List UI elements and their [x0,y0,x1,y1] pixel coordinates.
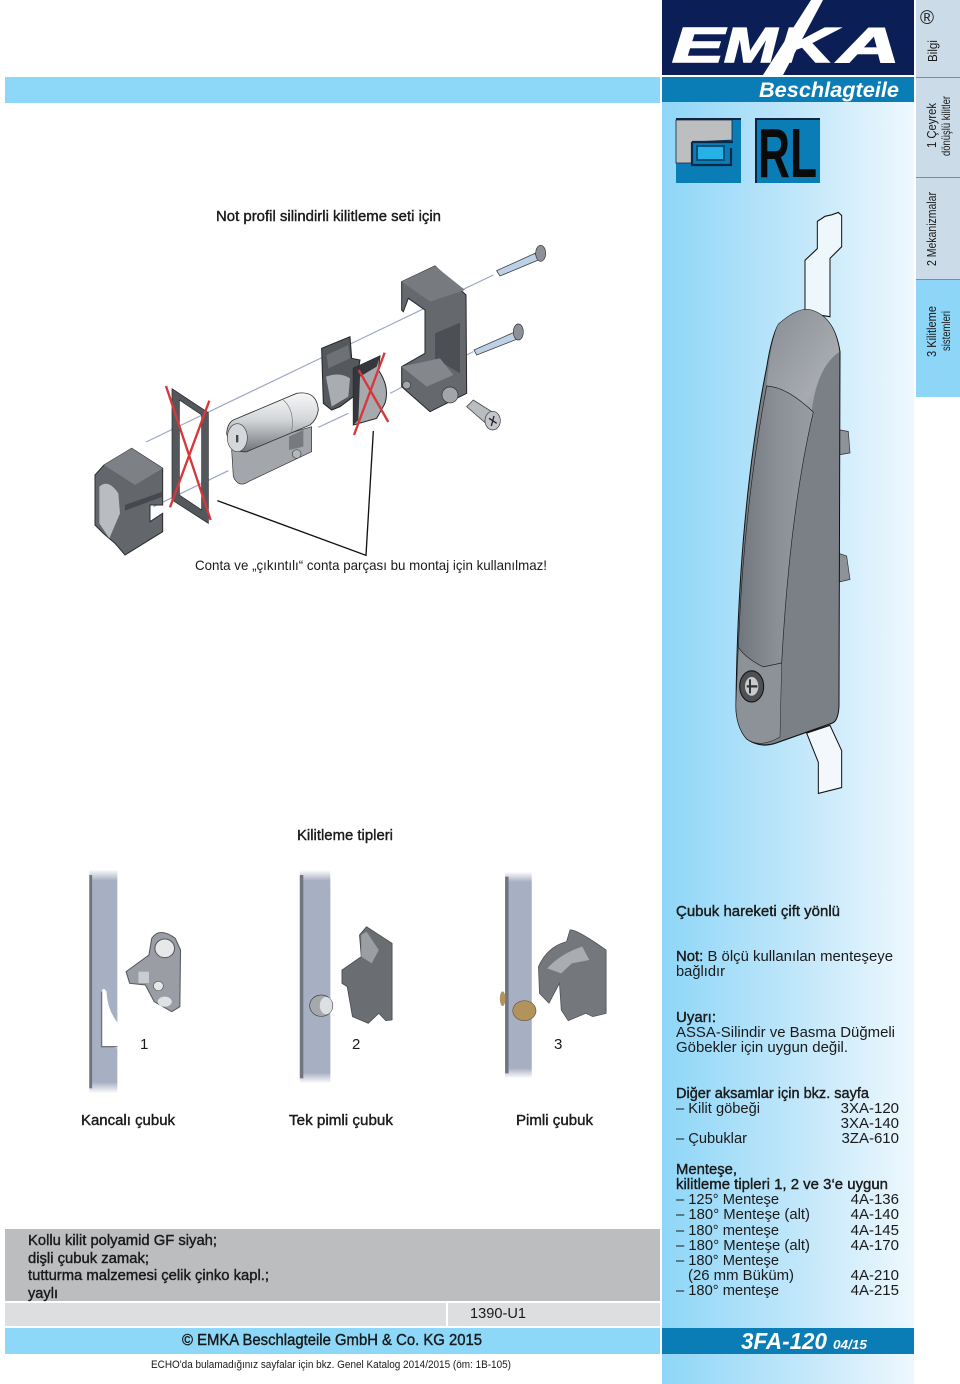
copyright band: © EMKA Beschlagteile GmbH & Co. KG 2015 [182,1332,482,1349]
list: hinges: – 180° Menteşe (alt) [676,1206,810,1223]
list: hinges: – 180° menteşe [676,1222,779,1239]
list: hinges: 4A-170 [851,1237,899,1254]
list: hinges: 4A-210 [851,1267,899,1284]
heading: kilitleme tipleri: Kilitleme tipleri [297,827,393,844]
type 1: hook rod [89,869,181,1093]
list: other accessories: – Çubuklar [676,1130,747,1147]
side tabs: sistemleri [939,311,953,351]
EMKA logo: K [778,18,840,72]
leader lines [217,431,373,555]
text: not [676,948,893,980]
side tabs: 1 Çeyrek [924,103,939,148]
text: uyari [676,1009,895,1056]
list: other accessories: 3XA-140 [841,1115,899,1132]
list: other accessories [676,1085,899,1147]
text: uyari: Göbekler için uygun değil. [676,1039,848,1056]
part number row [5,1303,660,1326]
type 2: single pin rod [300,870,392,1083]
copyright band [5,1328,660,1354]
top light blue band [5,77,660,103]
label: kancali cubuk: Kancalı çubuk [81,1112,175,1129]
page code band: 3FA-120 [741,1328,827,1354]
part number row: 1390-U1 [470,1305,526,1322]
handle illustration [736,212,850,793]
list: other accessories: Diğer aksamlar için bkz. sayfa [676,1085,870,1102]
number 1: 1 [140,1036,148,1053]
panel: material: Kollu kilit polyamid GF siyah; [28,1232,217,1249]
list: hinges: 4A-140 [851,1206,899,1223]
list: other accessories: 3ZA-610 [841,1130,899,1147]
list: hinges: Menteşe, [676,1161,737,1178]
seal piece left [322,337,360,410]
panel: material [5,1229,660,1302]
list: hinges: 4A-215 [851,1282,899,1299]
list: hinges: – 180° Menteşe [676,1252,779,1269]
text: uyari: ASSA-Silindir ve Basma Düğmeli [676,1024,895,1041]
side tabs: 3 Kilitleme [924,306,939,357]
bracket [402,266,467,412]
icon: RL [755,114,820,192]
page code band [662,1328,914,1354]
panel: material: yaylı [28,1285,58,1302]
left block [95,448,163,555]
text: uyari: Uyarı: [676,1009,716,1026]
locking types [89,869,606,1093]
Beschlagteile band: Beschlagteile [759,79,899,102]
number 2: 2 [352,1036,360,1053]
icon: profile [676,118,741,183]
seal frame [166,386,211,523]
heading: not profil: Not profil silindirli kilitleme seti için [216,208,441,225]
number 3: 3 [554,1036,562,1053]
type 3: pin rod [500,872,606,1078]
screws [467,245,546,430]
list: hinges: kilitleme tipleri 1, 2 ve 3‘e uygun [676,1176,888,1193]
list: hinges: – 125° Menteşe [676,1191,779,1208]
EMKA logo [662,0,914,75]
EMKA logo: M [724,19,779,73]
side tabs [916,0,960,397]
EMKA logo: A [836,18,900,73]
side tabs: dönüşlü kilitler [939,96,953,156]
exploded view [95,245,546,555]
footnote: ECHO'da bulamadığınız sayfalar için bkz. Genel Katalog 2014/2015 (öm: 1B-105) [151,1359,511,1371]
EMKA logo: E [672,18,727,72]
list: other accessories: 3XA-120 [841,1100,899,1117]
cylinder [227,393,318,484]
list: hinges: – 180° Menteşe (alt) [676,1237,810,1254]
list: hinges [676,1161,899,1299]
caption: conta: Conta ve „çıkıntılı“ conta parçası bu montaj için kullanılmaz! [195,557,547,573]
text: not: bağlıdır [676,963,725,980]
list: hinges: – 180° menteşe [676,1282,779,1299]
text: not: Not: B ölçü kullanılan menteşeye [676,948,893,965]
label: tek pimli cubuk: Tek pimli çubuk [289,1112,393,1129]
icon: RL: RL [758,114,817,192]
Beschlagteile band [662,77,914,102]
page code band: 04/15 [833,1337,868,1352]
side tabs: Bilgi [925,40,940,62]
right column background [662,102,914,1384]
list: other accessories: – Kilit göbeği [676,1100,760,1117]
seal piece right crossed [353,353,388,435]
side tabs: 2 Mekanizmalar [924,191,939,266]
list: hinges: 4A-145 [851,1222,899,1239]
side tabs: ® [920,8,934,29]
list: hinges: (26 mm Büküm) [688,1267,794,1284]
panel: material: dişli çubuk zamak; [28,1250,149,1267]
label: pimli cubuk: Pimli çubuk [516,1112,593,1129]
text: cubuk hareketi: Çubuk hareketi çift yönlü [676,903,840,920]
list: hinges: 4A-136 [851,1191,899,1208]
panel: material: tutturma malzemesi çelik çinko kapl.; [28,1267,269,1284]
